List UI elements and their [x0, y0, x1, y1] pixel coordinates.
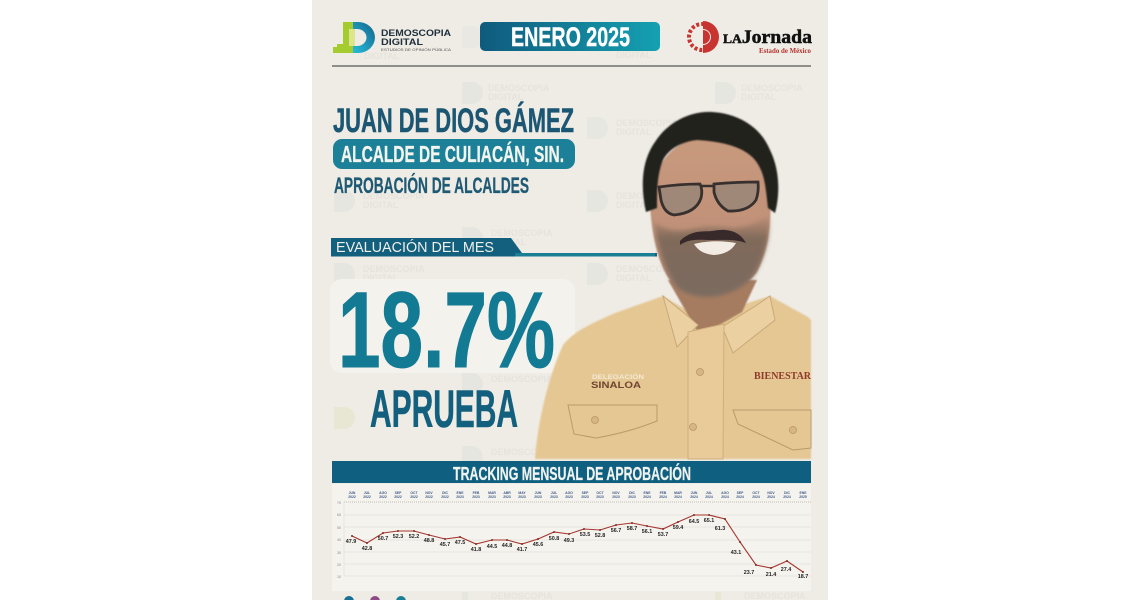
- month headers: FEB: [660, 491, 667, 495]
- shirt: [535, 296, 811, 459]
- role badge: ALCALDE DE CULIACÁN, SIN.: [341, 140, 564, 167]
- y axis: 50: [337, 526, 341, 530]
- month headers: JUN: [349, 491, 356, 495]
- watermark pattern: DEMOSCOPIA: [491, 228, 553, 238]
- month headers: 2024: [721, 495, 729, 499]
- y axis: [337, 501, 341, 579]
- month headers: 2023: [503, 495, 511, 499]
- data labels: 59.4: [673, 525, 683, 531]
- smile: [694, 241, 736, 255]
- watermark pattern: DEMOSCOPIA: [363, 191, 425, 201]
- month headers: MAY: [518, 491, 526, 495]
- month evaluation label: [331, 238, 657, 256]
- month headers: NOV: [425, 491, 433, 495]
- watermark pattern: DIGITAL: [616, 50, 652, 60]
- social icons: [344, 596, 406, 600]
- y axis: 30: [337, 551, 341, 555]
- month headers: AGO: [379, 491, 387, 495]
- month headers: [348, 491, 807, 499]
- month headers: ENE: [800, 491, 807, 495]
- data labels: 27.4: [781, 567, 791, 573]
- data labels: 18.7: [798, 574, 808, 580]
- month headers: 2022: [425, 495, 433, 499]
- month headers: 2023: [550, 495, 558, 499]
- month headers: 2023: [565, 495, 573, 499]
- month headers: AGO: [565, 491, 573, 495]
- portrait: BIENESTAR: [754, 371, 812, 382]
- data labels: 45.7: [440, 542, 450, 548]
- neck: [668, 280, 757, 336]
- data labels: 53.7: [658, 532, 668, 538]
- watermark pattern: DIGITAL: [741, 92, 777, 102]
- watermark pattern: DIGITAL: [616, 273, 652, 283]
- y axis: 70: [337, 501, 341, 505]
- month headers: 2025: [799, 495, 807, 499]
- header rule: [332, 65, 811, 67]
- data labels: 47.5: [455, 540, 465, 546]
- watermark pattern: DIGITAL: [491, 237, 527, 247]
- collar: [663, 296, 775, 353]
- month headers: 2024: [643, 495, 651, 499]
- watermark pattern: DIGITAL: [616, 127, 652, 137]
- subheading: APROBACIÓN DE ALCALDES: [334, 173, 529, 198]
- data labels: 50.7: [378, 536, 388, 542]
- month headers: 2023: [472, 495, 480, 499]
- beard: [654, 214, 770, 297]
- data labels: 53.5: [580, 532, 590, 538]
- month evaluation label: EVALUACIÓN DEL MES: [336, 239, 494, 256]
- data labels: 44.8: [502, 543, 512, 549]
- watermark pattern: DEMOSCOPIA: [363, 264, 425, 274]
- y axis: 10: [337, 575, 341, 579]
- shirt text: DELEGACIÓN: [592, 372, 644, 381]
- month headers: 2024: [674, 495, 682, 499]
- month headers: NOV: [767, 491, 775, 495]
- data labels: 47.9: [346, 539, 356, 545]
- watermark pattern: DIGITAL: [363, 200, 399, 210]
- month headers: 2022: [394, 495, 402, 499]
- month headers: FEB: [473, 491, 480, 495]
- month headers: 2022: [363, 495, 371, 499]
- month headers: OCT: [752, 491, 760, 495]
- data labels: 41.7: [517, 547, 527, 553]
- month headers: ENE: [644, 491, 651, 495]
- data labels: 42.8: [362, 546, 372, 552]
- month headers: 2022: [379, 495, 387, 499]
- y axis: 20: [337, 563, 341, 567]
- logo: Demoscopia Digital: ESTUDIOS DE OPINIÓN PÚBLICA: [381, 47, 451, 52]
- logo: La Jornada: [689, 21, 813, 55]
- role badge: [333, 139, 575, 169]
- line chart panel: [332, 484, 811, 591]
- y axis: 60: [337, 513, 341, 517]
- data labels: 44.5: [487, 544, 497, 550]
- buttons: [592, 368, 796, 434]
- watermark pattern: DEMOSCOPIA: [616, 118, 678, 128]
- watermark pattern: DIGITAL: [363, 273, 399, 283]
- month headers: 2024: [736, 495, 744, 499]
- panel: poster background: [312, 0, 828, 600]
- month headers: JUN: [535, 491, 542, 495]
- data labels: 50.8: [549, 536, 559, 542]
- pockets: [568, 405, 657, 438]
- month headers: 2023: [628, 495, 636, 499]
- month headers: SEP: [737, 491, 744, 495]
- month headers: 2024: [783, 495, 791, 499]
- month headers: 2024: [659, 495, 667, 499]
- logo: Demoscopia Digital: DEMOSCOPIA: [381, 28, 451, 39]
- month headers: 2024: [752, 495, 760, 499]
- data labels: 21.4: [766, 572, 776, 578]
- portrait: SINALOA: [591, 380, 642, 390]
- data labels: 23.7: [744, 570, 754, 576]
- placket: [688, 324, 724, 459]
- data labels: 58.7: [627, 526, 637, 532]
- data labels: 64.5: [689, 519, 699, 525]
- result box: 18.7%: [338, 269, 555, 390]
- y axis: 40: [337, 538, 341, 542]
- portrait: [535, 112, 812, 459]
- month headers: 2023: [581, 495, 589, 499]
- month headers: DIC: [629, 491, 635, 495]
- data labels: 65.1: [704, 518, 714, 524]
- data labels: 52.3: [393, 534, 403, 540]
- data labels: 43.1: [731, 550, 741, 556]
- month headers: ENE: [457, 491, 464, 495]
- data labels: [346, 518, 808, 580]
- month headers: NOV: [612, 491, 620, 495]
- face: [650, 135, 770, 295]
- watermark pattern: DIGITAL: [616, 200, 652, 210]
- watermark pattern: DEMOSCOPIA: [491, 374, 553, 384]
- data labels: 61.3: [715, 526, 725, 532]
- data labels: 52.2: [409, 534, 419, 540]
- heading: name: JUAN DE DIOS GÁMEZ: [333, 102, 574, 140]
- month headers: SEP: [395, 491, 402, 495]
- watermark pattern: DIGITAL: [488, 92, 524, 102]
- month headers: JUL: [364, 491, 370, 495]
- month headers: DIC: [784, 491, 790, 495]
- logo: Demoscopia Digital: DIGITAL: [381, 37, 423, 48]
- chart title bar: [332, 461, 811, 484]
- month headers: 2023: [596, 495, 604, 499]
- month headers: 2022: [410, 495, 418, 499]
- moustache: [680, 230, 746, 245]
- month headers: 2023: [534, 495, 542, 499]
- watermark pattern: DEMOSCOPIA: [491, 447, 553, 457]
- date badge: ENERO 2025: [511, 22, 630, 52]
- watermark pattern: DEMOSCOPIA: [741, 83, 803, 93]
- watermark pattern: DEMOSCOPIA: [488, 83, 550, 93]
- month headers: MAR: [488, 491, 496, 495]
- logo: La Jornada: LAJornada: [723, 27, 813, 48]
- glasses: [659, 182, 758, 215]
- month headers: JUL: [706, 491, 712, 495]
- month headers: 2022: [441, 495, 449, 499]
- month headers: 2022: [348, 495, 356, 499]
- approval label: APRUEBA: [370, 380, 518, 439]
- watermark pattern: DIGITAL: [364, 51, 400, 61]
- data labels: 52.8: [595, 533, 605, 539]
- month headers: OCT: [410, 491, 418, 495]
- logo: Demoscopia Digital: [333, 22, 451, 53]
- approval line: [351, 514, 804, 573]
- month headers: SEP: [582, 491, 589, 495]
- month headers: DIC: [442, 491, 448, 495]
- month headers: 2024: [690, 495, 698, 499]
- chart title bar: TRACKING MENSUAL DE APROBACIÓN: [453, 463, 691, 484]
- data labels: 45.6: [533, 542, 543, 548]
- data labels: 56.1: [642, 529, 652, 535]
- data labels: 56.7: [611, 528, 621, 534]
- month headers: 2023: [456, 495, 464, 499]
- hair: [643, 112, 778, 213]
- data labels: 48.8: [424, 538, 434, 544]
- month headers: ABR: [503, 491, 511, 495]
- data labels: 49.3: [564, 538, 574, 544]
- watermark pattern: DEMOSCOPIA: [616, 264, 678, 274]
- logo: La Jornada: Estado de México: [759, 47, 811, 55]
- month headers: 2023: [518, 495, 526, 499]
- data labels: 41.8: [471, 547, 481, 553]
- month headers: AGO: [721, 491, 729, 495]
- month headers: 2023: [488, 495, 496, 499]
- month headers: 2024: [767, 495, 775, 499]
- month headers: 2024: [705, 495, 713, 499]
- month headers: 2023: [612, 495, 620, 499]
- month headers: OCT: [596, 491, 604, 495]
- watermark pattern: [334, 26, 806, 600]
- watermark pattern: DEMOSCOPIA: [616, 191, 678, 201]
- month headers: JUN: [691, 491, 698, 495]
- month headers: MAR: [674, 491, 682, 495]
- month headers: JUL: [551, 491, 557, 495]
